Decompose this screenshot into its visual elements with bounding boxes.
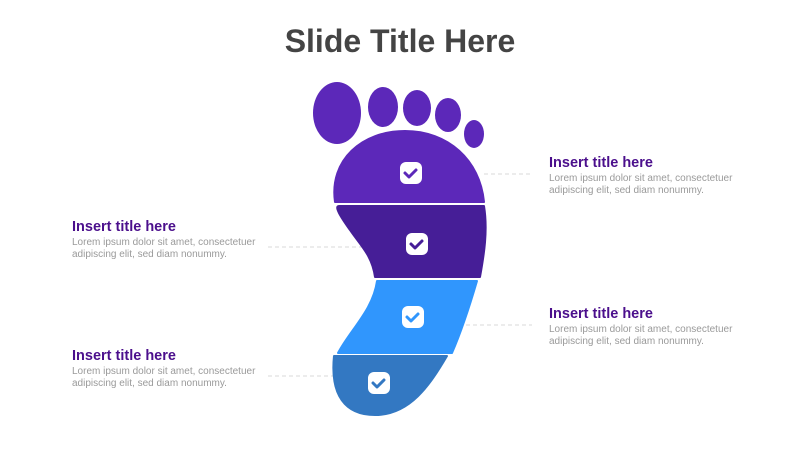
text block: left 1: Lorem ipsum dolor sit amet, consectetuer (72, 237, 256, 248)
text block: right 1: Insert title here (549, 155, 653, 171)
title: Slide Title Here (285, 23, 515, 59)
connector lines (268, 174, 532, 376)
segment 1 (334, 131, 484, 202)
text block: left 2: Insert title here (72, 348, 176, 364)
text block: right 2: Lorem ipsum dolor sit amet, consectetuer (549, 324, 733, 335)
text block: left 1 (72, 219, 256, 260)
segment 4 (333, 356, 447, 415)
text block: left 2: Lorem ipsum dolor sit amet, consectetuer (72, 366, 256, 377)
text block: left 2 (72, 348, 256, 389)
text block: left 1: Insert title here (72, 219, 176, 235)
text block: right 2: adipiscing elit, sed diam nonummy. (549, 336, 704, 347)
text block: left 2: adipiscing elit, sed diam nonummy. (72, 378, 227, 389)
segment 3 (338, 281, 477, 353)
text block: right 1: adipiscing elit, sed diam nonummy. (549, 185, 704, 196)
text block: left 1: adipiscing elit, sed diam nonummy. (72, 249, 227, 260)
text block: right 2: Insert title here (549, 306, 653, 322)
check icons (368, 162, 428, 394)
text block: right 1 (549, 155, 733, 196)
text block: right 2 (549, 306, 733, 347)
text block: right 1: Lorem ipsum dolor sit amet, consectetuer (549, 173, 733, 184)
toes (313, 82, 484, 148)
segment 2 (337, 206, 486, 277)
icon: footprint (313, 82, 486, 415)
